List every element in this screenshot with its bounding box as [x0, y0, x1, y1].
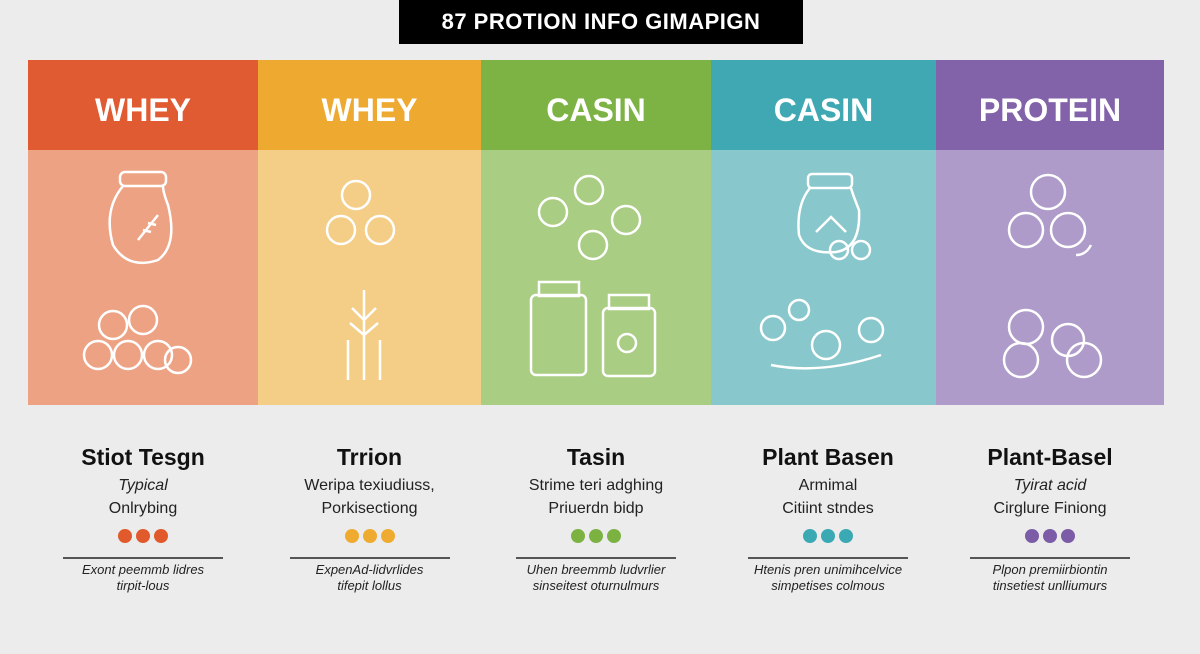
text block: col3: Uhen breemmb ludvrlier — [527, 562, 665, 577]
text block: col5: Cirglure Finiong — [994, 500, 1106, 517]
panel: casin green — [481, 60, 711, 405]
text block: col3: Tasin — [567, 444, 625, 470]
text block: col3: sinseitest oturnulmurs — [533, 578, 659, 593]
text block: col5: Plpon premiirbiontin — [993, 562, 1107, 577]
text block: col2: tifepit lollus — [337, 578, 402, 593]
panel: casin teal — [711, 60, 936, 405]
panel body with icons — [481, 150, 711, 405]
text block: col1: Onlrybing — [109, 500, 177, 517]
heading: protein — [936, 60, 1164, 150]
panel: whey orange — [28, 60, 258, 405]
text block: col3 — [516, 444, 676, 593]
heading: casin — [711, 60, 936, 150]
text block: col1: Stiot Tesgn — [81, 444, 205, 470]
panel body with icons — [28, 150, 258, 405]
text block: col4: Htenis pren unimihcelvice — [754, 562, 902, 577]
text block: col4: Armimal — [799, 477, 857, 494]
text block: col4: Citiint stndes — [782, 500, 874, 517]
heading: casin: CASIN — [546, 92, 646, 128]
text block: col1: Typical — [118, 477, 168, 494]
text block: col4: Plant Basen — [762, 444, 894, 470]
text block: col1 — [63, 444, 223, 593]
text block: col2: ExpenAd-lidvrlides — [316, 562, 423, 577]
text block: col5: tinsetiest unlliumurs — [993, 578, 1107, 593]
text block: col5 — [970, 444, 1130, 593]
title — [399, 0, 803, 44]
text block: col5: Plant-Basel — [987, 444, 1113, 470]
heading: whey — [28, 60, 258, 150]
panel: protein purple — [936, 60, 1164, 405]
heading: whey — [258, 60, 481, 150]
text block: col3: Priuerdn bidp — [548, 500, 644, 517]
text block: col1: tirpit-lous — [117, 578, 169, 593]
heading: casin: CASIN — [774, 92, 873, 128]
text block: col2: Porkisectiong — [321, 500, 418, 517]
panel body with icons — [258, 150, 481, 405]
title: 87 PROTION INFO GIMAPIGN — [442, 9, 760, 34]
heading: protein: PROTEIN — [979, 92, 1121, 128]
text block: col4: simpetises colmous — [771, 578, 885, 593]
panel body with icons — [711, 150, 936, 405]
panel body with icons — [936, 150, 1164, 405]
text block: col3: Strime teri adghing — [529, 477, 663, 494]
heading: casin — [481, 60, 711, 150]
text block: col5: Tyirat acid — [1014, 477, 1086, 494]
panel: whey yellow — [258, 60, 481, 405]
text block: col4 — [748, 444, 908, 593]
heading: whey: WHEY — [95, 92, 191, 128]
text block: col2: Trrion — [337, 444, 402, 470]
text block: col2: Weripa texiudiuss, — [304, 477, 435, 494]
text block: col1: Exont peemmb lidres — [82, 562, 204, 577]
heading: whey: WHEY — [322, 92, 418, 128]
text block: col2 — [290, 444, 450, 593]
